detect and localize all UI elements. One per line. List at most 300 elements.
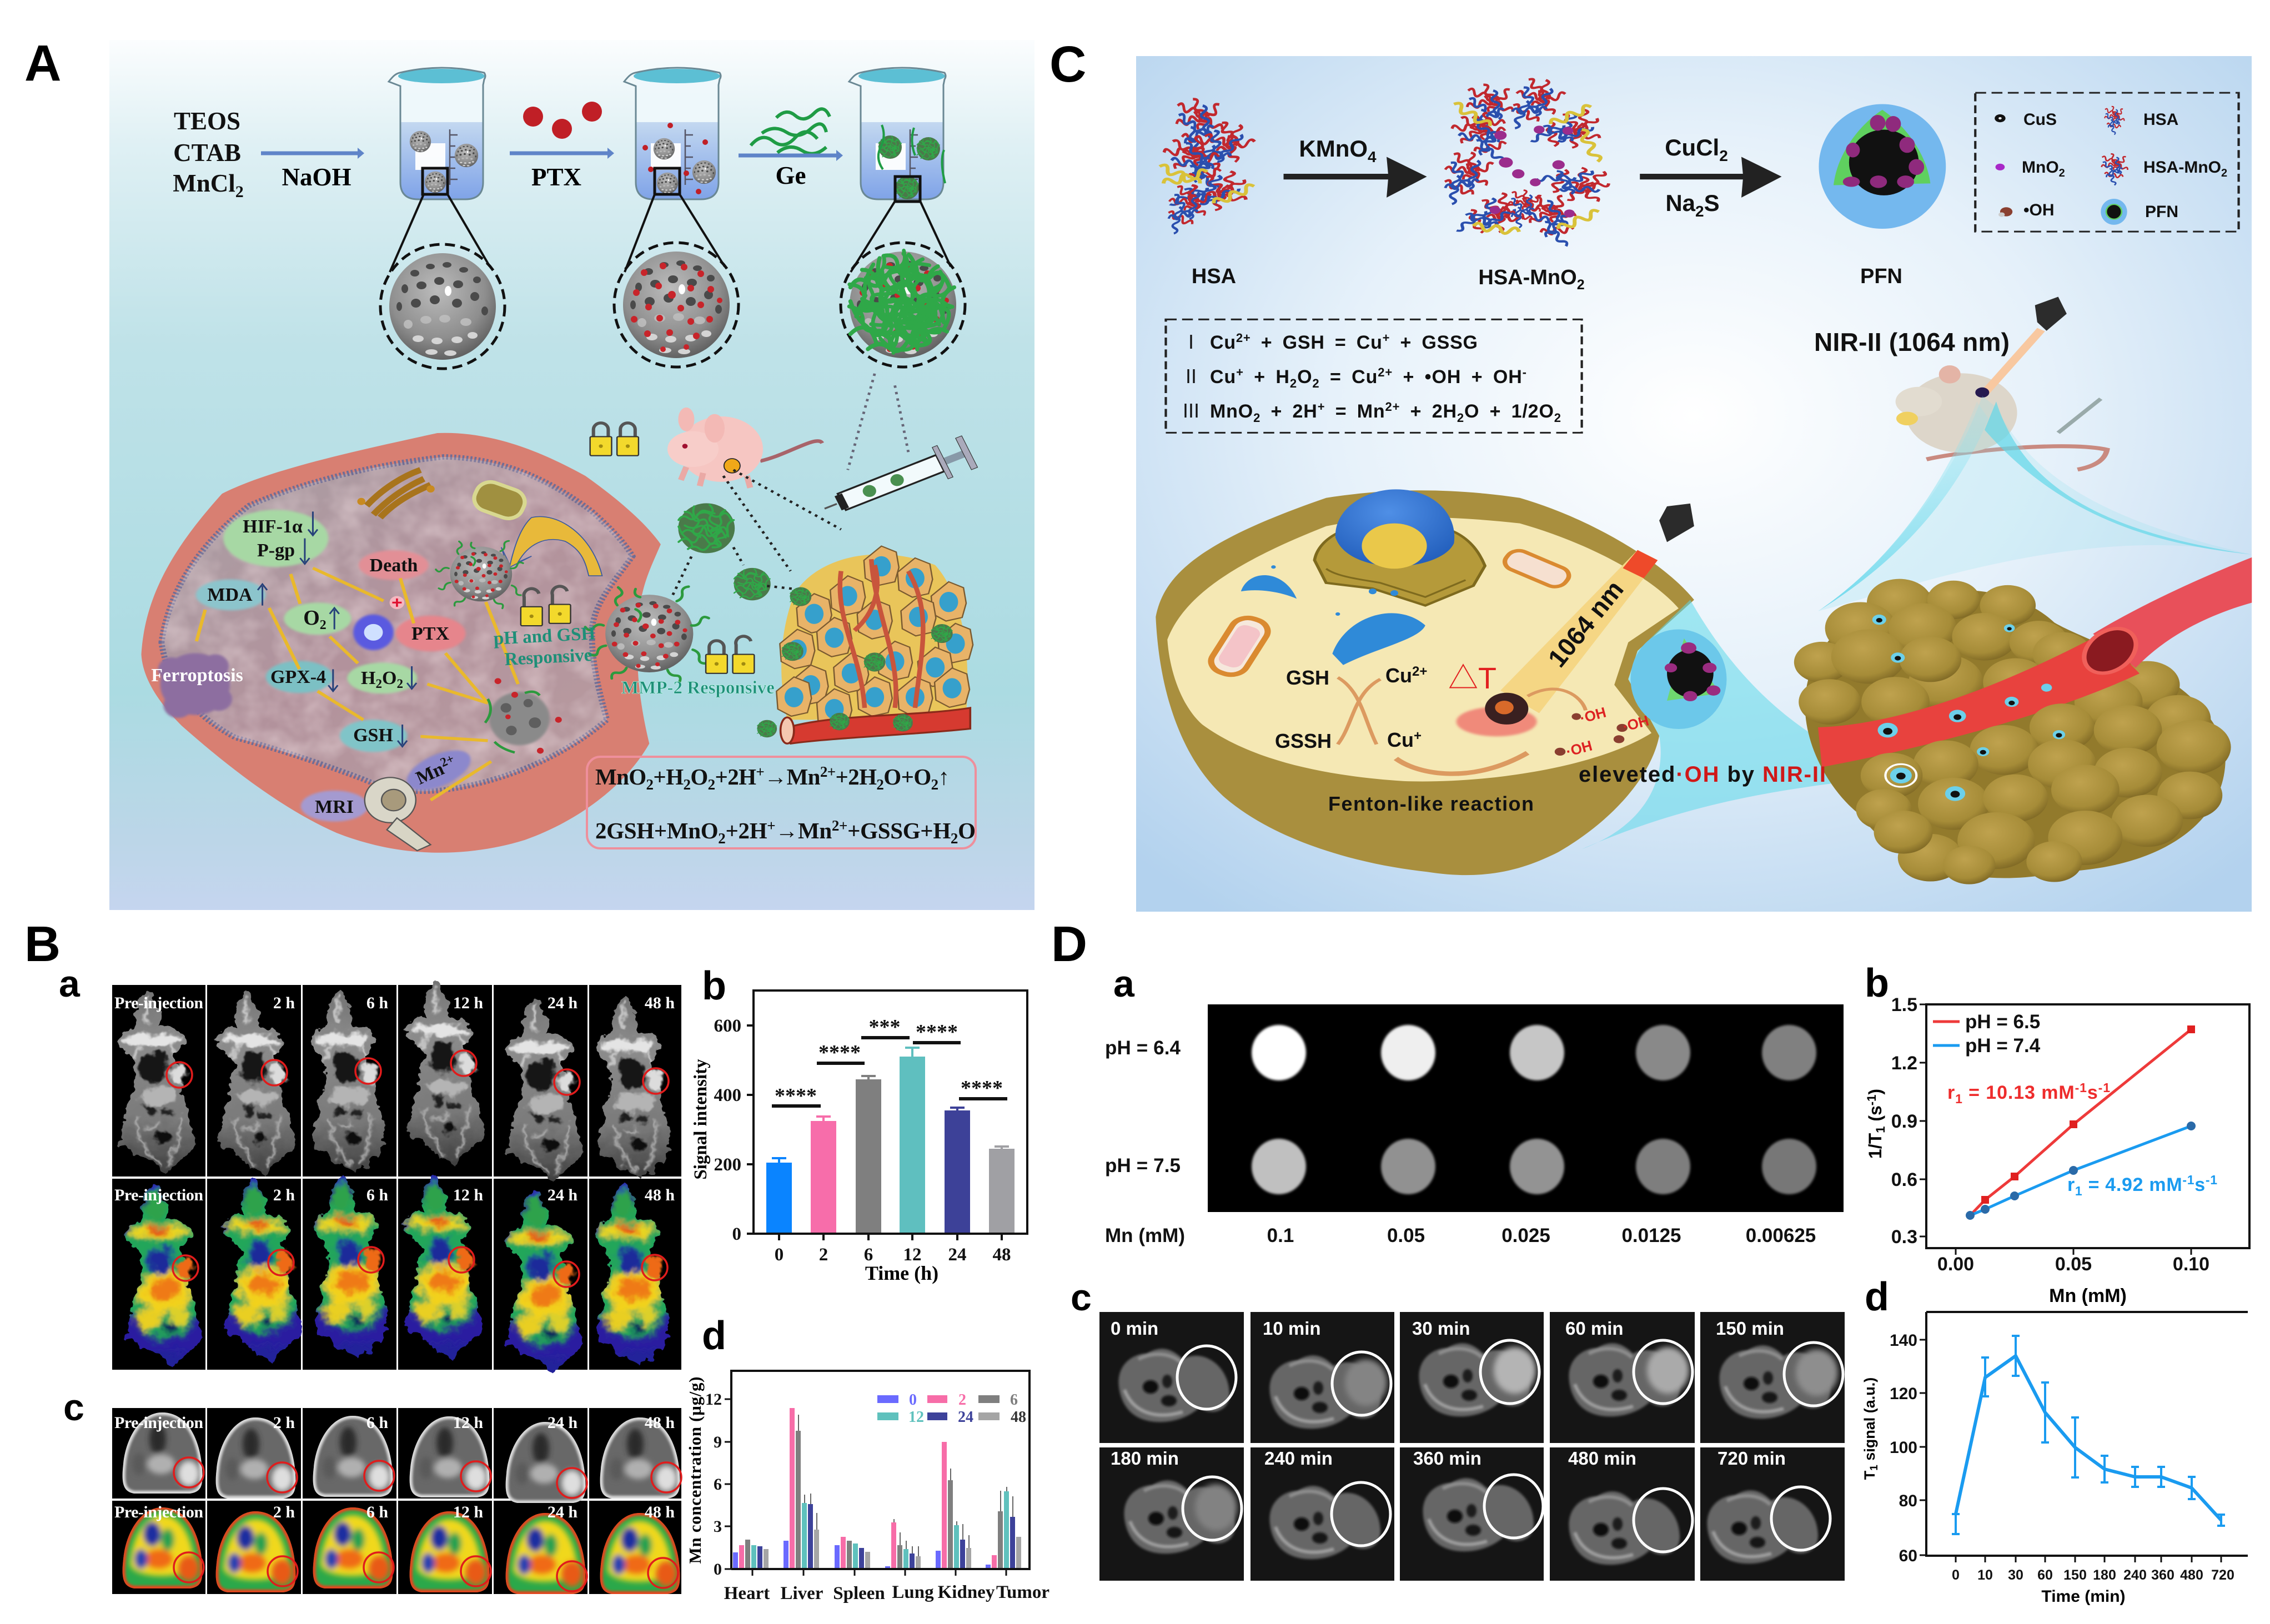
HSA-MnO2 protein ring [1430,73,1614,253]
tick labels: 240 [2123,1567,2147,1583]
legend: pH = 7.4 [1965,1035,2041,1057]
reaction equations box: 2 [708,776,715,793]
Fenton reaction equations: + •OH + OH [1393,366,1522,388]
tick labels: 600 [714,1016,741,1036]
reaction equations box [587,757,976,848]
time labels: 480 min [1568,1448,1636,1469]
relaxivity annotations: -1 [2182,1173,2194,1187]
bar chart: Mn biodistribution [685,1371,1049,1603]
time labels: 0 min [1111,1318,1158,1339]
synthesis labels: S [1704,190,1720,216]
phantom wells [1252,1025,1816,1194]
reagents list: CTAB [173,139,241,167]
locks [521,423,754,673]
bar chart: signal intensity [691,991,1027,1284]
tick labels: 0 [714,1560,722,1578]
cell labels: Mn [413,758,447,789]
cell labels: GPX-4 [270,667,326,687]
tumor cell illustration [141,374,977,853]
tick labels: 360 [2151,1567,2174,1583]
bar chart: signal intensity: **** [818,1041,861,1064]
Fenton reaction equations: + [1236,365,1243,379]
panel A: synthesis and mechanism schematic [109,40,1034,910]
axis title: Mn concentration (µg/g) [685,1377,705,1563]
hydroxyl radical dots [1555,713,1628,756]
synthesis labels: CuCl [1665,134,1719,160]
tick labels: 120 [1890,1385,1917,1403]
enhanced tumors [1195,1347,1838,1531]
Fenton reaction equations [1182,331,1561,425]
Fenton reaction equations: + [1318,400,1325,414]
time labels: 150 min [1716,1318,1784,1339]
dotted guide lines [673,374,908,595]
mouse cross sections [1118,1343,1830,1565]
cell reaction labels [1275,664,1534,815]
synthesis labels: PFN [1860,265,1902,288]
tick labels: 2 [819,1245,828,1265]
relaxivity annotations: -1 [2075,1080,2087,1095]
time labels: 10 min [1263,1318,1321,1339]
panel label: C: C [1049,36,1086,93]
reaction equations box: + [756,763,765,780]
legend text: PFN [2145,203,2178,221]
time labels: 12 h [453,1503,483,1521]
row labels: pH = 7.5 [1105,1155,1181,1176]
grouped bars [733,1408,1021,1569]
tick labels [1891,994,2209,1275]
axis titles: Time (min) [2041,1587,2126,1606]
cell labels: 2 [375,677,382,691]
sub label a: a [1113,963,1135,1005]
synthesis labels: 4 [1368,148,1377,165]
time labels: 12 h [453,1186,483,1204]
tick labels: 0.05 [2055,1254,2092,1275]
relaxivity annotations: = 4.92 mM [2082,1174,2182,1195]
signal ovals [196,510,518,822]
synthesis labels [1192,134,1902,293]
axes [1926,1004,2249,1248]
tick labels: 0 [1952,1567,1960,1583]
hydroxyl labels: ·OH [1564,737,1594,760]
relaxivity annotations: 1 [2075,1184,2082,1198]
series: pH 6.5 [1970,1025,2195,1215]
relaxivity annotations: -1 [2206,1173,2217,1187]
concentration labels [1267,1225,1816,1246]
Fenton reaction equations: + 2H [1400,401,1457,422]
tick labels: 140 [1890,1331,1917,1350]
organ labels: Heart [724,1583,770,1603]
bar chart: signal intensity: *** [868,1015,901,1039]
legend icons [1995,106,2128,225]
panel label: D: D [1051,917,1087,972]
Fenton reaction equations: - [1523,365,1526,379]
reaction equations box: MnO [595,764,646,790]
line chart: relaxivity [1865,994,2249,1306]
Fenton reaction equations: 2+ [1236,331,1250,345]
legend: 12 [908,1409,924,1426]
relaxivity annotations: r [1947,1082,1955,1103]
line chart: T1 signal over time: signal (a.u.) [1861,1377,1878,1465]
cell reaction labels: + [1414,728,1422,743]
Fenton reaction equations: 2 [1457,411,1464,425]
synthesis labels: KMnO [1299,135,1368,162]
tick labels: 6 [714,1475,722,1494]
laser beam in cell [1500,504,1694,713]
time labels: Pre-injection [114,1414,203,1432]
cell labels: GSH [353,725,393,746]
beaker 2 with loaded particles [624,68,721,199]
panel label: B: B [24,917,61,972]
legend: pH = 6.5 [1965,1011,2040,1033]
tumor circles [167,1050,669,1287]
time-course MRI grid [1099,1312,1845,1581]
axis titles: Mn (mM) [2049,1285,2127,1306]
cell labels: MRI [315,797,354,817]
tick labels: 9 [714,1433,722,1451]
sub label d: d [1865,1275,1889,1319]
line chart: relaxivity: 1/T [1865,1133,1885,1159]
reaction equations box: 2 [951,830,958,847]
legend text: HSA-MnO [2143,158,2221,177]
sub label b: b [702,964,726,1008]
line chart: relaxivity: 1 [1874,1127,1887,1133]
time labels: Pre-injection [114,1186,203,1204]
grayscale mice [111,976,681,1184]
tick labels: 0.00 [1937,1254,1974,1275]
legend text: •OH [2023,201,2055,219]
tick labels: 1.5 [1891,994,1917,1015]
image tiles [1099,1312,1845,1581]
line chart: T1 signal over time: 1 [1869,1465,1880,1471]
Fenton reaction equations: + 2H [1260,401,1317,422]
tick labels: 60 [1899,1547,1917,1565]
cell labels: HIF-1α [243,516,303,537]
cell labels: O [303,606,320,630]
zoom lines [390,194,951,272]
time labels: 48 h [645,1503,675,1521]
tumor spheroid [1794,579,2226,878]
row labels [1105,1037,1185,1246]
Fenton reaction equations: Ⅲ [1182,401,1201,422]
synthesis labels: 2 [1719,147,1728,164]
cell reaction labels: 2+ [1412,664,1427,679]
legend text: CuS [2023,110,2057,129]
arrow: NaOH step [261,148,364,191]
time labels: Pre-injection [114,1503,203,1521]
cell labels: 2+ [438,751,456,770]
reaction equations box: 2 [683,776,691,793]
relaxivity annotations: 1 [1955,1092,1962,1106]
reaction equations box: +H [653,764,684,790]
tick labels: 12 [903,1245,922,1265]
tumor tissue with vessels [757,546,973,743]
time labels: 48 h [645,1414,675,1432]
Fenton reaction equations: O + 1/2O [1464,401,1554,422]
arrow: PTX step: PTX [531,163,581,191]
delta T label: △T [1448,662,1496,695]
pseudo-color slices [118,1501,689,1601]
icon: PTX drug spheres [523,102,602,139]
cell labels: PTX [411,624,449,644]
relaxivity annotations: r [2067,1174,2075,1195]
tick labels: 10 [1977,1567,1993,1583]
reaction equations box: 2+ [832,817,847,834]
reaction curved arrows [1338,677,1586,774]
nanoparticle 2: drug loaded sphere [614,243,739,367]
reaction equations box: 2 [876,776,884,793]
tick labels: 0.10 [2173,1254,2209,1275]
sub label a: a [59,963,81,1005]
organ labels [724,1582,1049,1603]
relaxivity annotations: -1 [2098,1080,2110,1095]
time labels: 180 min [1111,1448,1179,1469]
panel label: A: A [24,35,61,92]
hydroxyl labels: ·OH [1578,703,1608,727]
concentration labels: 0.1 [1267,1225,1294,1246]
blood vessel [1818,557,2252,767]
reaction equations box: O+O [883,764,931,790]
cell labels: Ferroptosis [151,665,243,686]
elevated OH caption: eleveted·OH by NIR-II [1579,762,1826,787]
free particles [678,503,771,600]
line chart: T1 signal over time: T [1861,1471,1878,1480]
relaxivity annotations [1947,1080,2217,1198]
sub label c: c [63,1386,84,1429]
time labels: 6 h [366,1186,388,1204]
Fenton reaction equations: 2 [1312,376,1319,390]
tick labels [705,1390,722,1578]
time labels: 6 h [366,994,388,1012]
legend text: HSA [2143,110,2178,129]
concentration labels: 0.025 [1501,1225,1550,1246]
arrow: PTX step [510,148,614,191]
concentration labels: 0.00625 [1746,1225,1816,1246]
Fenton reaction equations: Ⅰ [1182,332,1201,353]
reaction equations box: 2GSH+MnO [595,818,719,843]
arrow: KMnO4 [1284,157,1427,198]
time labels: 12 h [453,994,483,1012]
reaction equations box: →Mn [764,764,821,790]
responsive labels: pH and GSH [493,624,596,649]
1064 nm beam label: 1064 nm [1542,575,1629,672]
reaction equations box: +2H [836,764,877,790]
cell reaction labels: Cu [1385,664,1412,687]
Fenton reaction equations: = Cu [1320,366,1377,388]
mouse with laser [1896,296,2107,470]
time labels: 24 h [548,1503,577,1521]
time labels: 2 h [273,1414,295,1432]
bar chart: signal intensity: **** [916,1020,958,1044]
cell reaction labels: Cu [1387,728,1414,751]
Fenton reaction equations: + GSH = Cu [1251,332,1382,353]
time labels: 360 min [1413,1448,1481,1469]
organ labels: Liver [781,1583,823,1603]
series: pH 7.4 [1966,1122,2196,1220]
PFN in cell [1630,629,1726,729]
ferroptosis blob [158,653,232,718]
time labels: 48 h [645,1186,675,1204]
phantom MRI panel [1105,1004,1844,1246]
curved uptake arrow [501,516,602,576]
tick labels: 0.6 [1891,1169,1917,1190]
arrow: CuCl2 / Na2S [1640,157,1782,198]
tumor spheroid front [1856,703,2231,884]
cell labels: Death [370,555,418,576]
reaction equations box: →Mn [775,818,832,843]
line chart: relaxivity: (s [1865,1105,1885,1127]
tick labels: 60 [2037,1567,2053,1583]
Fenton reaction equations: Ⅱ [1182,366,1201,388]
cell reaction labels: Fenton-like reaction [1328,792,1534,815]
legend: 2 [958,1391,966,1409]
Fenton reaction equations: 2 [1253,411,1260,425]
sub label c: c [1071,1276,1092,1319]
Fenton reaction equations: + H [1244,366,1289,388]
reaction equations box: 2 [718,830,726,847]
significance bars [772,1038,1007,1106]
degraded particle [485,678,562,753]
responsive labels: MMP-2 Responsive [621,678,775,698]
reaction equations box: 2 [931,776,938,793]
tick labels: 400 [714,1085,741,1105]
tick labels: 6 [864,1245,873,1265]
cell labels: P-gp [257,540,295,561]
legend text: 2 [2059,167,2065,179]
axes [731,1371,1029,1569]
time labels [1111,1318,1786,1469]
responsive labels: Responsive [504,645,592,670]
light cone: cell to tumor [1582,600,1900,849]
light cone: mouse to tumor [1818,396,2252,611]
cell reaction labels: GSH [1286,666,1329,689]
tick labels: 180 [2093,1567,2116,1583]
cell labels: O [382,668,396,688]
organelles [353,470,529,650]
whole-body MRI grid [111,976,681,1376]
reaction equations box: + [767,817,776,834]
time labels: 6 h [366,1503,388,1521]
sub label b: b [1865,961,1889,1005]
beaker 1 with nanoparticles [389,68,485,199]
legend text: MnO [2022,158,2059,177]
nanoparticle 3: gelatin coated sphere [837,236,971,370]
tick labels: 3 [714,1517,722,1536]
relaxivity annotations: s [2087,1082,2098,1103]
tick labels: 12 [705,1390,722,1409]
tick labels: 0 [775,1245,784,1265]
time labels: 24 h [548,1414,577,1432]
tick labels: 720 [2211,1567,2234,1583]
Fenton reaction equations: = Mn [1325,401,1385,422]
bar chart: signal intensity: Signal intensity [691,1059,711,1180]
legend: 24 [958,1409,973,1426]
tick labels: 0 [732,1224,741,1244]
reaction equations box: +GSSG+H [847,818,951,843]
legend: 48 [1011,1409,1026,1426]
legend [1933,1011,2041,1057]
tick labels: 150 [2063,1567,2087,1583]
Fenton reaction equations: 2+ [1378,365,1392,379]
tick labels: 80 [1899,1492,1917,1510]
time labels: 2 h [273,1186,295,1204]
tumor circles [1177,1340,1843,1552]
signal line with error bars [1952,1336,2225,1534]
bar chart: signal intensity: **** [775,1084,817,1108]
dashed frames [1166,93,2239,433]
legend text [2022,110,2227,221]
cell labels: 2 [396,677,403,691]
Fenton reaction equations: O [1297,366,1312,388]
Fenton reaction equations: + [1383,331,1390,345]
hydroxyl labels: ·OH [1621,712,1651,735]
reaction equations box: ↑ [938,764,950,790]
syringe [817,436,977,525]
time labels: 6 h [366,1414,388,1432]
Fenton reaction equations: 2 [1290,376,1297,390]
time labels: 30 min [1412,1318,1470,1339]
reagents list [173,107,244,201]
MRI scanner [365,777,430,851]
concentration labels: 0.0125 [1621,1225,1681,1246]
tick labels: 1.2 [1891,1053,1917,1074]
tick labels: 100 [1890,1439,1917,1457]
axes [1926,1312,2248,1556]
reagents list: MnCl [173,169,235,197]
Fenton reaction equations: Cu [1210,366,1236,388]
synthesis labels: HSA-MnO [1478,266,1577,289]
line chart: T1 signal over time [1861,1312,2248,1606]
sub label d: d [702,1314,726,1358]
time labels: 24 h [548,994,577,1012]
legend [877,1391,1026,1426]
NIR-II label: NIR-II (1064 nm) [1814,328,2010,356]
HSA protein [1154,98,1264,239]
time labels: 24 h [548,1186,577,1204]
legend: 0 [909,1391,917,1409]
organ labels: Tumor [996,1582,1049,1602]
legend text: 2 [2221,167,2227,179]
reaction equations box: +2H [725,818,767,843]
tick labels: 48 [993,1245,1011,1265]
reaction equations box: 2 [646,776,654,793]
hot spot [1457,693,1537,736]
particle in cytoplasm [436,541,523,609]
organ labels: Lung [892,1582,934,1602]
tick labels: 30 [2008,1567,2023,1583]
beaker 3 with gated particles [849,68,946,202]
axes [754,991,1027,1234]
nanoparticle 1: mesoporous sphere [380,244,505,369]
tick labels [714,1016,1011,1265]
time labels: 720 min [1717,1448,1786,1469]
icon: Ge polymer squiggles [751,109,830,154]
row labels: Mn (mM) [1105,1225,1185,1246]
reagents list: TEOS [174,107,240,135]
tick labels: 0.3 [1891,1226,1917,1248]
bar chart: signal intensity: **** [961,1077,1003,1100]
arrow: NaOH step: NaOH [282,163,351,191]
tick labels: 24 [948,1245,966,1265]
tick labels: 480 [2180,1567,2203,1583]
cell labels: H [361,668,375,688]
reaction equations box: +2H [715,764,756,790]
nude mouse [667,408,822,488]
time labels: 240 min [1264,1448,1333,1469]
Fenton reaction equations: MnO [1210,401,1253,422]
Fenton reaction equations: 2+ [1385,400,1400,414]
cell labels: MDA [207,585,253,605]
pseudo-color mice [118,1170,680,1376]
